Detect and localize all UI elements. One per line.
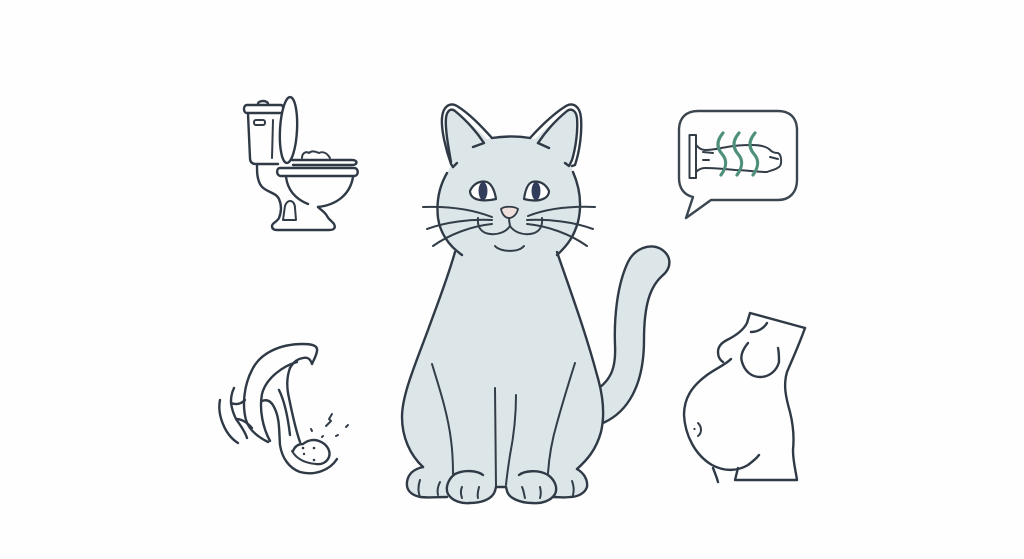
right back paw bbox=[553, 469, 587, 497]
left front paw toes bbox=[461, 487, 479, 498]
middle fold bbox=[279, 390, 290, 435]
tank button bbox=[254, 120, 265, 125]
lower tract bbox=[262, 400, 337, 473]
cat body and head silhouette bbox=[402, 110, 603, 503]
scattered particles bbox=[311, 414, 348, 437]
toilet seat rim bbox=[277, 168, 358, 176]
left whiskers bbox=[423, 207, 492, 246]
raised lid bbox=[278, 97, 299, 163]
stool mass bbox=[293, 440, 330, 464]
tract outer curve bbox=[244, 344, 317, 442]
motion lines bbox=[219, 400, 238, 443]
left front paw bbox=[447, 471, 506, 503]
body outline right bbox=[557, 252, 603, 469]
front left leg bbox=[432, 364, 453, 474]
left eye bbox=[470, 181, 496, 200]
toilet seat top bbox=[292, 160, 356, 165]
torso shoulder and back bbox=[718, 313, 805, 362]
icon: pregnant torso bbox=[684, 313, 805, 482]
leg line bbox=[713, 468, 718, 482]
front center legs bbox=[495, 388, 516, 487]
right ear bbox=[530, 104, 581, 166]
head sides bbox=[437, 172, 580, 255]
nose bbox=[501, 207, 518, 218]
right tract wall bbox=[287, 368, 300, 442]
left back paw bbox=[407, 467, 447, 497]
mouth bbox=[478, 218, 542, 234]
speech bubble bbox=[679, 111, 797, 218]
left back paw toes bbox=[418, 480, 440, 497]
pedestal opening bbox=[283, 201, 296, 220]
toilet tank lid bbox=[244, 101, 283, 113]
intestine segment bbox=[690, 135, 781, 178]
smile bbox=[495, 246, 524, 251]
body outline left bbox=[402, 252, 455, 467]
icon: speech bubble with worms bbox=[679, 111, 797, 218]
right eye bbox=[524, 181, 549, 200]
icon: toilet bbox=[244, 97, 358, 230]
right back paw toes bbox=[572, 481, 574, 495]
front right leg bbox=[548, 363, 575, 473]
breast bbox=[741, 343, 779, 377]
collar arc bbox=[751, 323, 767, 332]
toilet bowl bbox=[286, 177, 353, 207]
stool specks bbox=[302, 447, 315, 461]
head top bbox=[492, 136, 530, 138]
left ear bbox=[442, 104, 492, 167]
tract inner curve bbox=[261, 362, 297, 441]
right front paw toes bbox=[522, 487, 541, 498]
tank line bbox=[272, 120, 273, 158]
cat tail bbox=[599, 247, 669, 423]
inner stool curve bbox=[292, 451, 316, 464]
toilet contents bbox=[302, 151, 330, 158]
central cat bbox=[402, 104, 669, 503]
icon: digestive tract bbox=[219, 344, 348, 473]
navel bbox=[693, 423, 701, 436]
right whiskers bbox=[527, 207, 595, 246]
parasite worms bbox=[718, 133, 758, 175]
toilet tank bbox=[248, 114, 278, 164]
ridge lines bbox=[231, 388, 252, 438]
back and hip bbox=[735, 328, 805, 480]
belly bbox=[684, 359, 759, 470]
right front paw bbox=[506, 471, 556, 503]
toilet pedestal bbox=[257, 165, 335, 230]
